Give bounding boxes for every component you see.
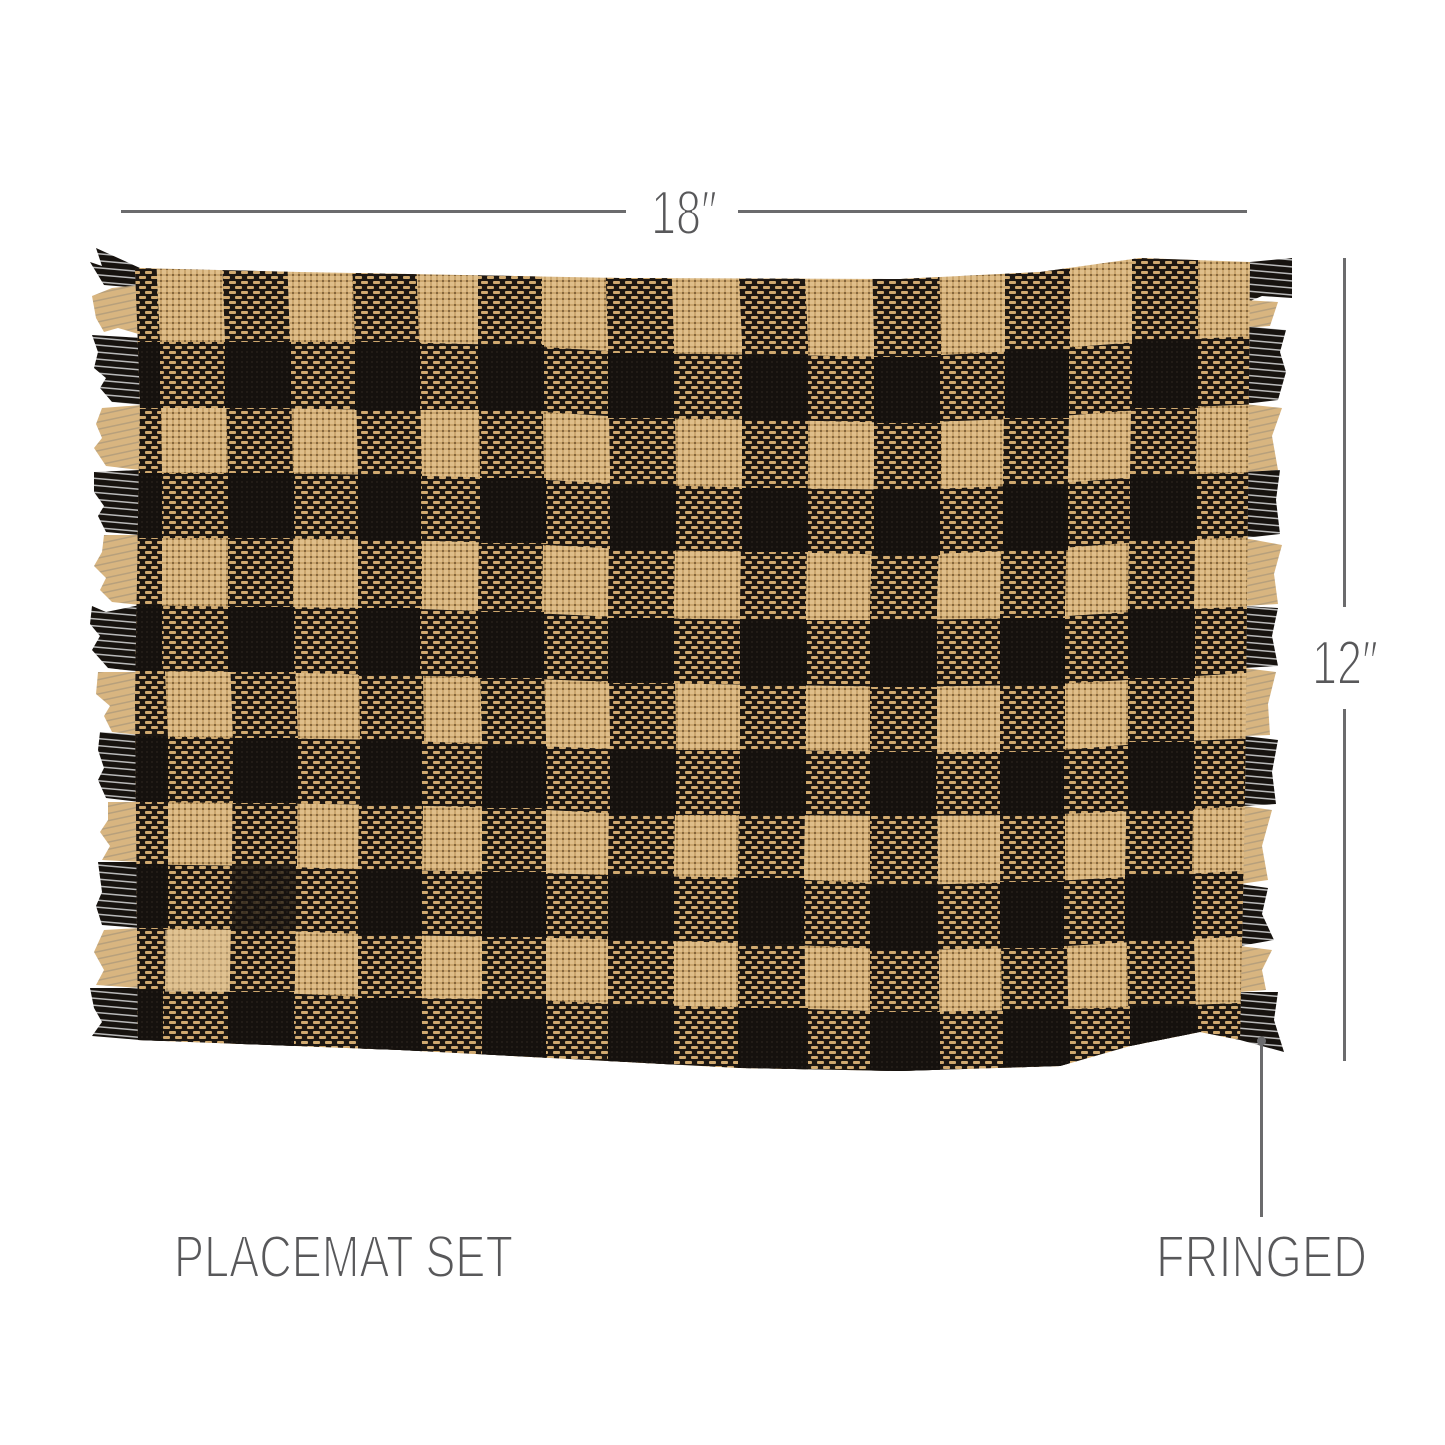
height label: 12″ — [1312, 629, 1378, 698]
left fringe — [90, 248, 142, 1040]
dark warp columns — [120, 255, 1198, 1080]
height dimension line — [1343, 258, 1346, 1061]
solid black squares — [125, 340, 1198, 1074]
tan base cloth — [120, 250, 1260, 1080]
dark weft bands — [120, 336, 1260, 1080]
fringed label: FRINGED — [1156, 1224, 1367, 1290]
callout line to fringe — [1257, 1036, 1266, 1217]
infographic canvas — [90, 191, 1376, 1276]
worn patch in the weave — [165, 866, 296, 992]
placemat: buffalo check fabric — [120, 250, 1260, 1080]
width label: 18″ — [651, 179, 717, 248]
product name: PLACEMAT SET — [174, 1224, 513, 1290]
right fringe — [1240, 258, 1292, 1052]
width dimension line — [121, 210, 1247, 213]
